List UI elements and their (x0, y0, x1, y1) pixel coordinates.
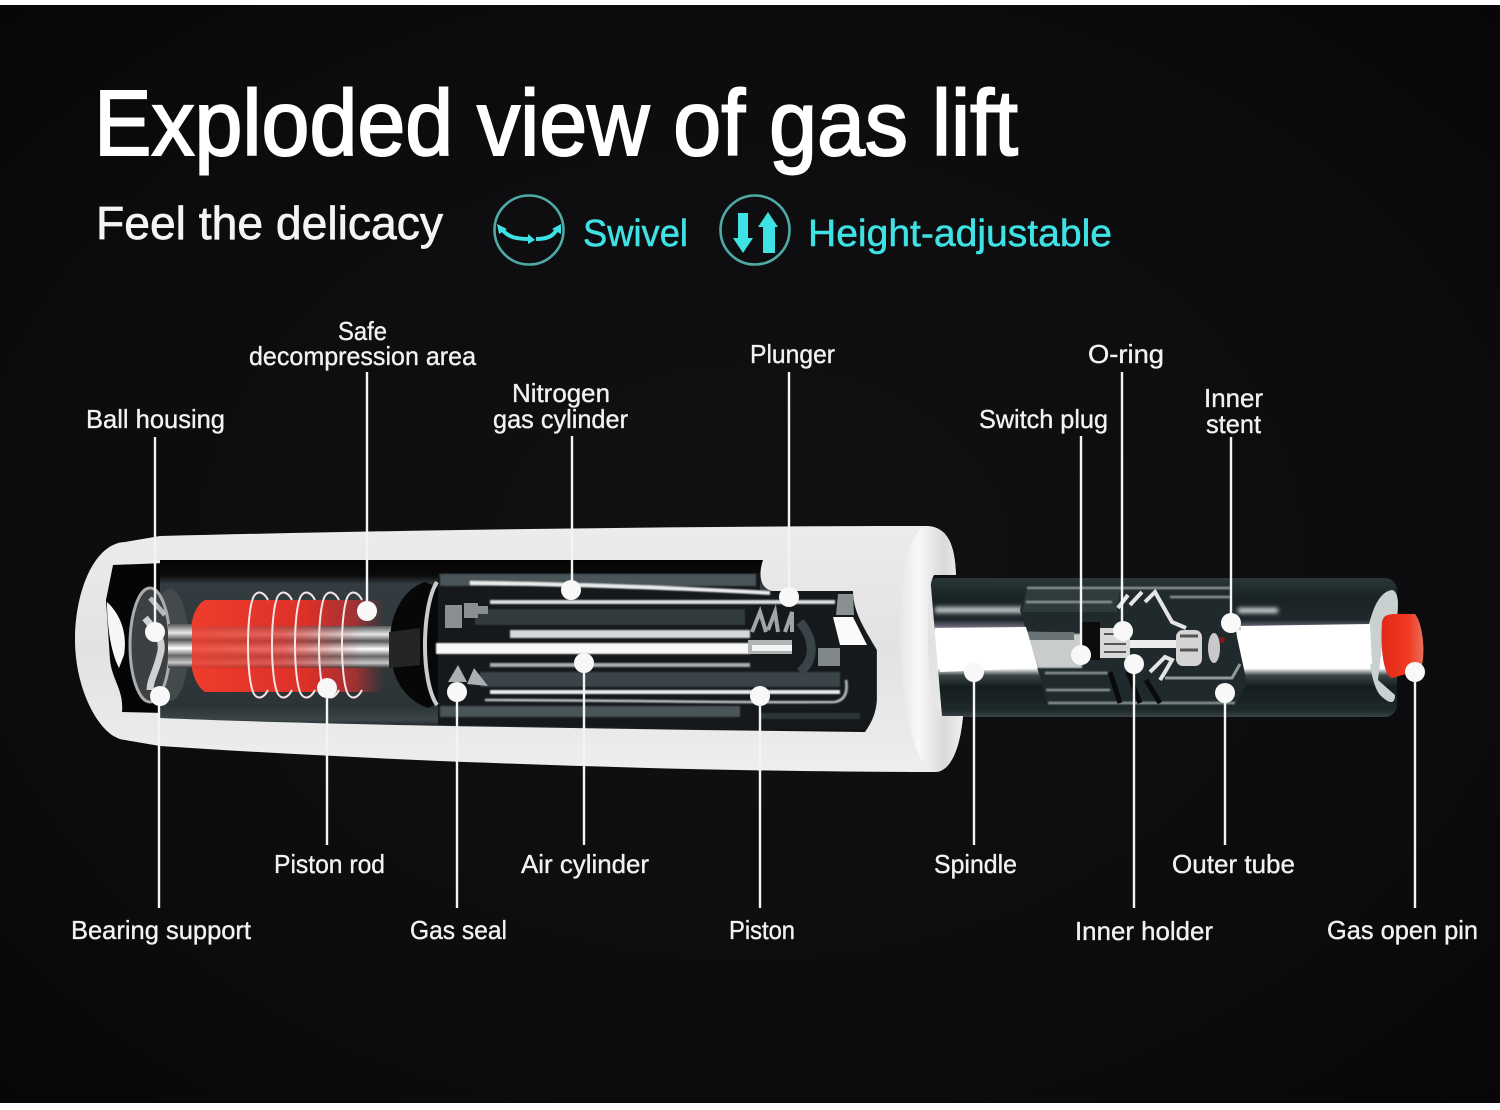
label: switch plug: Switch plug (979, 404, 1108, 434)
o-ring leader (1113, 372, 1133, 641)
gas open pin leader (1405, 662, 1425, 908)
label: inner stent: stent (1206, 409, 1262, 439)
inner holder leader (1124, 654, 1144, 908)
black seal disc (390, 582, 445, 708)
height-adjustable label: Height-adjustable (808, 213, 1112, 255)
label: air cylinder: Air cylinder (521, 849, 649, 879)
gas lift cutaway illustration (75, 526, 1423, 772)
switch plug leader (1071, 436, 1091, 665)
air cylinder internals (425, 573, 876, 730)
label: inner stent (1204, 383, 1263, 439)
white outer shell (75, 526, 963, 772)
icon: height adjustable (720, 196, 790, 264)
main cavity (160, 560, 877, 732)
label: safe decompression area: Safe (338, 316, 387, 346)
label: inner stent: Inner (1204, 383, 1263, 413)
label: gas seal: Gas seal (410, 915, 507, 945)
label: piston: Piston (729, 915, 795, 945)
spindle (925, 578, 1397, 717)
spindle end ring (1368, 590, 1398, 702)
red gas open pin (1381, 614, 1423, 678)
label: nitrogen gas cylinder: gas cylinder (493, 404, 628, 434)
ball housing (130, 588, 189, 702)
spindle cutaway window (1020, 587, 1247, 703)
nitrogen cylinder leader (561, 436, 581, 600)
spindle leader (964, 662, 984, 845)
air cylinder leader (574, 653, 594, 845)
chrome band on spindle (935, 627, 1038, 672)
piston rod (168, 624, 392, 668)
inner stent leader (1221, 437, 1241, 633)
leader lines and dots (145, 372, 1425, 908)
label: bearing support: Bearing support (71, 915, 252, 945)
label: outer tube: Outer tube (1172, 849, 1295, 879)
bearing support leader (150, 686, 170, 908)
piston leader (750, 686, 770, 908)
label: nitrogen gas cylinder (493, 378, 628, 434)
shell front rim (900, 526, 963, 772)
plunger leader (779, 372, 799, 607)
left cap cavity (106, 563, 165, 713)
swivel label: Swivel (583, 213, 688, 255)
white inner highlight of left cap (107, 602, 125, 668)
label: safe decompression area: decompression area (249, 341, 477, 371)
label: gas open pin: Gas open pin (1327, 915, 1478, 945)
red spring chamber (190, 600, 385, 692)
subtitle: Feel the delicacy (96, 197, 443, 249)
ball housing leader (145, 437, 165, 642)
label: spindle: Spindle (934, 849, 1017, 879)
outer tube leader (1215, 683, 1235, 845)
label: piston rod: Piston rod (274, 849, 385, 879)
piston rod leader (317, 678, 337, 845)
label: inner holder: Inner holder (1075, 916, 1213, 946)
gas seal leader (447, 682, 467, 908)
title: Exploded view of gas lift (94, 71, 1018, 175)
spring coils (248, 593, 362, 697)
label: o-ring: O-ring (1088, 339, 1164, 369)
safe decompression leader (357, 372, 377, 621)
label: plunger: Plunger (750, 339, 835, 369)
icon: swivel (494, 196, 564, 264)
label: nitrogen gas cylinder: Nitrogen (512, 378, 610, 408)
label: ball housing: Ball housing (86, 404, 225, 434)
label: safe decompression area (249, 316, 477, 371)
